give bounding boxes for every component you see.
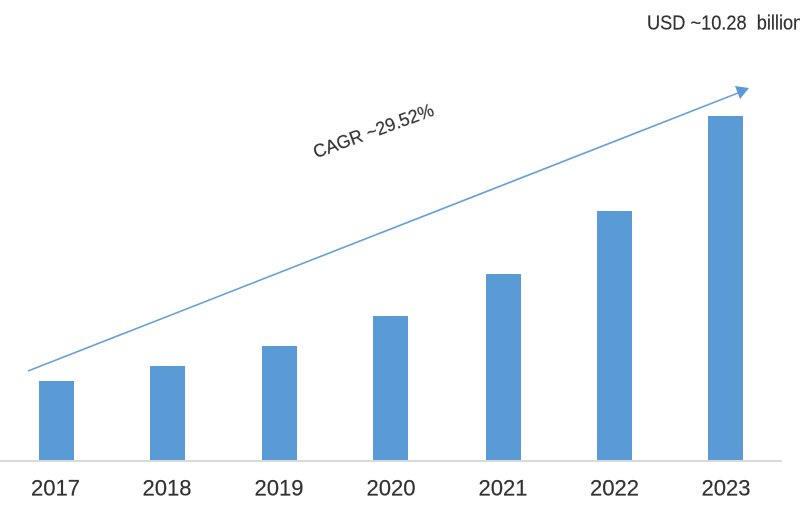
- label 2022: 2022: [590, 475, 639, 501]
- label 2019: 2019: [254, 475, 304, 501]
- bar 2018: [150, 366, 185, 460]
- bars: [39, 116, 743, 460]
- bar 2020: [373, 316, 408, 460]
- growth arrow: [28, 86, 749, 371]
- label 2021: 2021: [478, 475, 528, 501]
- label 2023: 2023: [701, 475, 751, 501]
- label 2018: 2018: [142, 475, 192, 501]
- value callout: USD ~10.28 billion: USD ~10.28 billion: [647, 13, 800, 35]
- x axis: [0, 460, 782, 462]
- label 2020: 2020: [366, 475, 416, 501]
- x axis labels: [31, 475, 751, 501]
- CAGR label: CAGR ~29.52%: [310, 100, 437, 162]
- bar 2023: [708, 116, 743, 460]
- bar 2021: [486, 274, 521, 460]
- bar 2022: [597, 211, 632, 460]
- bar 2019: [262, 346, 297, 460]
- label 2017: 2017: [31, 475, 80, 501]
- bar 2017: [39, 381, 74, 460]
